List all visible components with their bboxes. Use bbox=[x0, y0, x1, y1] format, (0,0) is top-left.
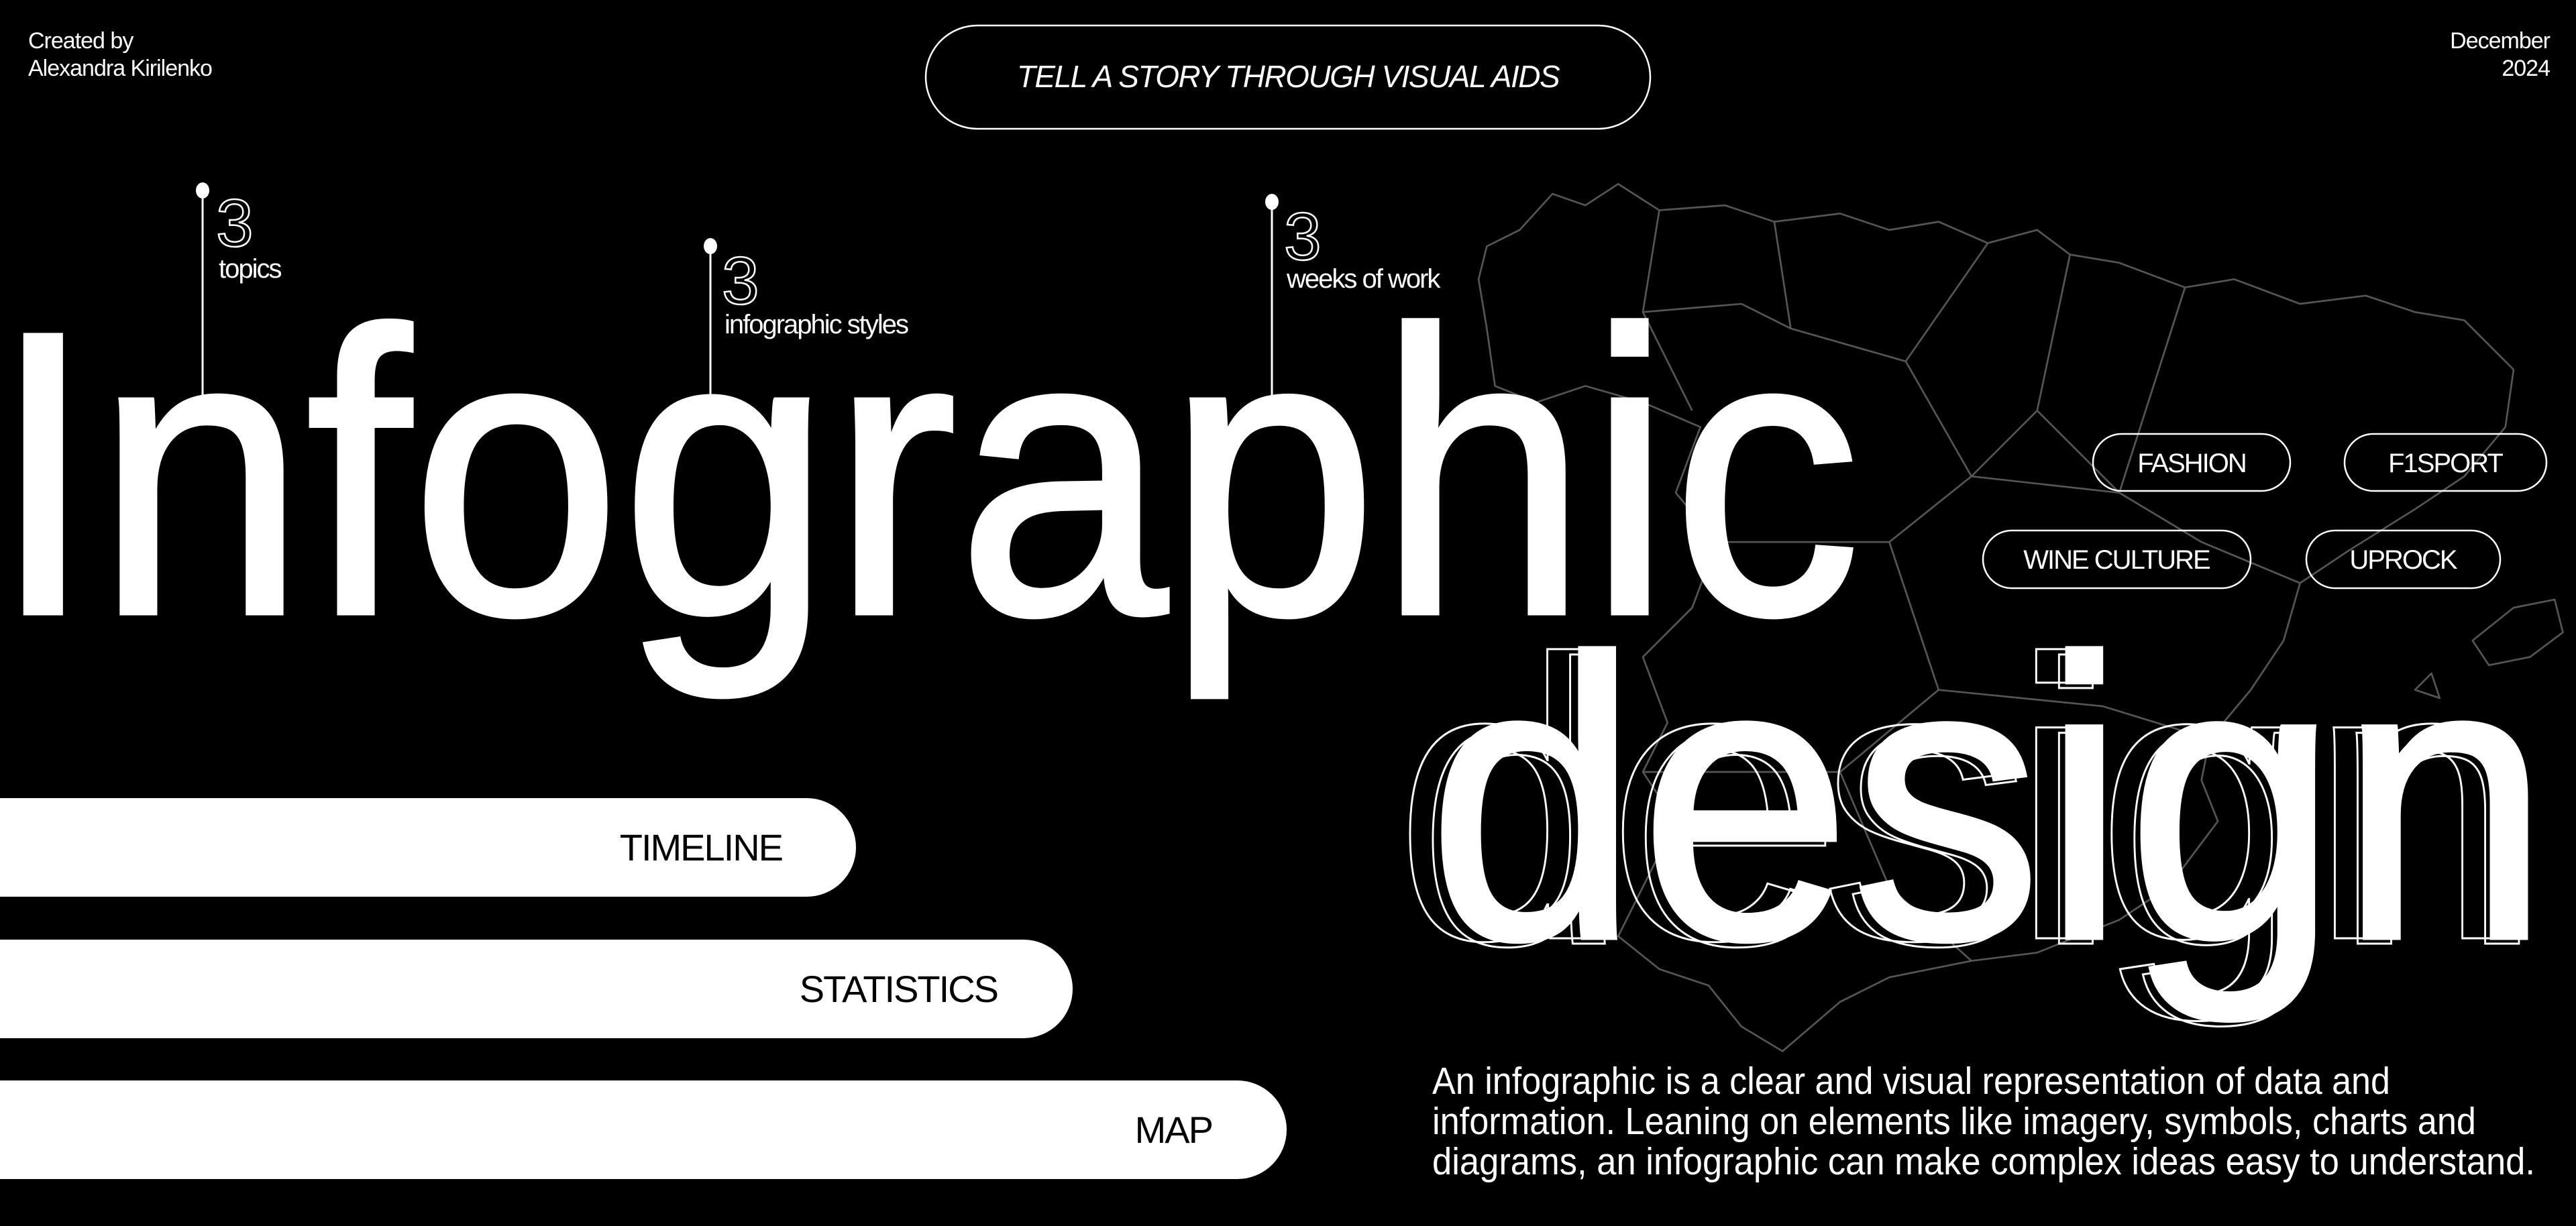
tag: wine culture: WINE CULTURE bbox=[2023, 545, 2210, 575]
header: created by bbox=[28, 28, 212, 81]
tag: uprock: UPROCK bbox=[2349, 545, 2458, 575]
tag: uprock bbox=[2306, 531, 2500, 588]
header: tagline pill bbox=[926, 25, 1650, 129]
stat pin: 3 topics bbox=[196, 182, 281, 402]
stat pin: 3 infographic styles: infographic styles bbox=[724, 310, 908, 339]
stat pin: 3 topics: topics bbox=[219, 254, 281, 284]
header: date: 2024 bbox=[2502, 56, 2550, 81]
bar: map: MAP bbox=[1135, 1109, 1212, 1151]
header: date bbox=[2450, 28, 2551, 81]
tag: fashion: FASHION bbox=[2137, 449, 2246, 478]
stat pin: 3 infographic styles: 3 bbox=[722, 243, 759, 319]
tag: fashion bbox=[2093, 434, 2290, 491]
header: created by: Created by bbox=[28, 28, 133, 54]
text block: description bbox=[1432, 1060, 2535, 1183]
stat pin: 3 weeks of work: weeks of work bbox=[1286, 264, 1441, 294]
stat pin: 3 infographic styles bbox=[704, 238, 908, 402]
stat pin: 3 weeks of work: 3 bbox=[1284, 199, 1322, 274]
text block: description: information. Leaning on elements like imagery, symbols, charts and bbox=[1432, 1100, 2476, 1143]
header: created by: Alexandra Kirilenko bbox=[28, 56, 212, 81]
map: spain regions bbox=[1479, 184, 2563, 1051]
title: design with outline echoes: design bbox=[1417, 583, 2544, 1031]
bar: map bbox=[0, 1080, 1287, 1179]
tag: wine culture bbox=[1983, 531, 2251, 588]
title: Infographic: Infographic bbox=[0, 247, 1861, 702]
header: date: December bbox=[2450, 28, 2551, 54]
bar: statistics: STATISTICS bbox=[800, 968, 998, 1010]
tag: f1 sport bbox=[2345, 434, 2546, 491]
bar: timeline: TIMELINE bbox=[620, 826, 782, 869]
header: tagline pill: TELL A STORY THROUGH VISUAL AIDS bbox=[1017, 59, 1560, 94]
bar: timeline bbox=[0, 798, 856, 897]
stat pin: 3 weeks of work bbox=[1265, 194, 1441, 402]
bar: statistics bbox=[0, 940, 1073, 1038]
stat pin: 3 topics: 3 bbox=[216, 186, 254, 261]
text block: description: An infographic is a clear and visual representation of data and bbox=[1432, 1060, 2390, 1103]
tag: f1 sport: F1SPORT bbox=[2388, 449, 2503, 478]
title: design with outline echoes: design bbox=[1394, 577, 2521, 1025]
title: design with outline echoes: design bbox=[1428, 577, 2551, 1025]
